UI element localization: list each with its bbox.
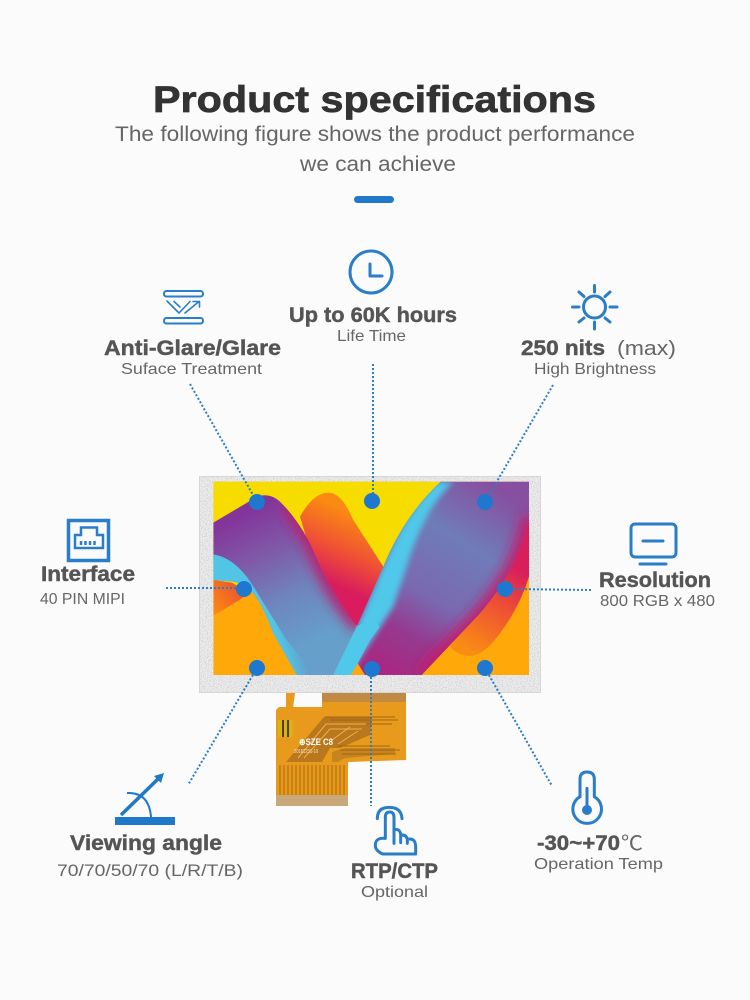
callout: resolution — [599, 524, 715, 610]
callout: surface treatment: Anti-Glare/Glare — [104, 337, 281, 360]
metal bezel — [199, 476, 541, 693]
callout: life time: Up to 60K hours — [289, 304, 457, 327]
subtitle — [115, 123, 635, 176]
circuit traces — [286, 717, 372, 762]
callout: viewing angle: 70/70/50/70 (L/R/T/B) — [57, 861, 243, 880]
callout: brightness — [521, 286, 676, 378]
callout: life time — [289, 251, 457, 345]
callout: interface: Interface — [41, 563, 135, 586]
accent bar — [354, 196, 394, 203]
icon: connector port — [68, 520, 108, 560]
callout: operating temperature: Operation Temp — [534, 856, 663, 873]
callout: resolution: 800 RGB x 480 — [600, 593, 715, 610]
callout: surface treatment: Suface Treatment — [121, 361, 263, 378]
callout: touch panel — [351, 807, 438, 901]
callout: operating temperature: ℃ — [621, 833, 643, 855]
callout: touch panel: Optional — [361, 884, 428, 901]
icon: sun — [572, 286, 617, 329]
callout: interface: 40 PIN MIPI — [40, 591, 125, 608]
callout: interface — [40, 520, 135, 608]
leader lines — [166, 364, 592, 806]
callout: brightness: 250 nits — [521, 337, 605, 360]
icon: touch finger — [375, 807, 416, 854]
callout: resolution: Resolution — [599, 569, 711, 592]
fpc ribbon cable: 20181231-10 — [294, 749, 318, 755]
callout: touch panel: RTP/CTP — [351, 860, 438, 883]
callout: viewing angle — [57, 773, 243, 880]
icon: viewing angle — [115, 773, 175, 825]
callout: life time: Life Time — [337, 328, 406, 345]
lcd panel — [199, 476, 541, 693]
subtitle: we can achieve — [299, 153, 456, 176]
fpc ribbon cable — [276, 693, 406, 806]
icon: monitor — [631, 524, 676, 564]
subtitle: The following figure shows the product performance — [115, 123, 635, 146]
callout: brightness: High Brightness — [534, 361, 656, 378]
icon: clock — [350, 251, 392, 293]
callout: operating temperature — [534, 772, 663, 873]
icon: thermometer — [573, 772, 601, 823]
screen artwork — [213, 482, 529, 675]
marker dots — [236, 493, 513, 677]
icon: anti-glare — [164, 291, 203, 324]
title: Product specifications — [153, 79, 596, 120]
callout: viewing angle: Viewing angle — [70, 832, 222, 855]
fpc marking: ⊕SZE C8 — [299, 737, 333, 747]
callout: surface treatment — [104, 291, 281, 378]
callout: brightness: (max) — [617, 338, 676, 360]
callout: operating temperature: -30~+70 — [537, 832, 620, 855]
flex circuit board — [276, 693, 406, 806]
